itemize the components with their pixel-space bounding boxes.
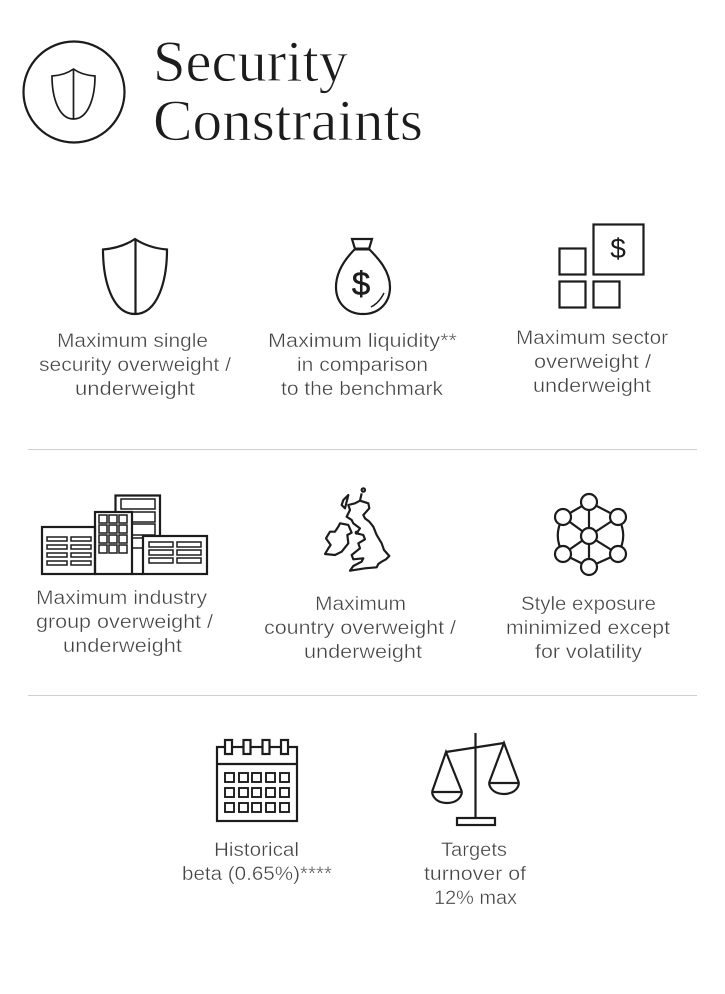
label: country: country overweight / — [264, 618, 457, 639]
icon: buildings — [42, 496, 207, 574]
label: style exposure: minimized except — [506, 618, 671, 639]
label: sector: underweight — [533, 376, 652, 397]
icon: money bag — [336, 239, 390, 314]
label: liquidity: in comparison — [297, 355, 428, 376]
label: country — [264, 594, 457, 663]
icon: network of circles — [555, 494, 626, 575]
icon: shield — [103, 239, 167, 314]
title — [153, 29, 423, 153]
label: industry group: group overweight / — [36, 612, 214, 633]
label: historical beta — [182, 840, 333, 885]
label: single security: underweight — [75, 379, 196, 400]
label: historical beta: Historical — [214, 840, 299, 861]
label: liquidity: Maximum liquidity** — [268, 331, 458, 352]
label: sector — [516, 328, 669, 397]
label: single security — [39, 331, 232, 400]
label: turnover target: turnover of — [424, 864, 527, 885]
label: sector: Maximum sector — [516, 328, 669, 349]
title: Security — [153, 29, 348, 94]
icon: calendar — [217, 740, 297, 821]
icon: sector squares: $ — [610, 233, 626, 264]
icon: sector squares — [560, 224, 644, 308]
icon: balance scales — [432, 733, 519, 825]
label: style exposure: for volatility — [535, 642, 643, 663]
label: single security: security overweight / — [39, 355, 232, 376]
label: country: underweight — [304, 642, 423, 663]
label: liquidity — [268, 331, 458, 400]
label: turnover target: Targets — [441, 840, 507, 861]
label: industry group: Maximum industry — [36, 588, 208, 609]
label: style exposure: Style exposure — [521, 594, 656, 615]
label: sector: overweight / — [534, 352, 652, 373]
label: turnover target: 12% max — [434, 888, 518, 909]
title: Constraints — [153, 88, 423, 153]
label: industry group — [36, 588, 214, 657]
icon: money bag: $ — [352, 265, 370, 302]
label: historical beta: beta (0.65%)**** — [182, 864, 333, 885]
header icon: shield in circle — [24, 42, 124, 142]
label: style exposure — [506, 594, 671, 663]
label: industry group: underweight — [63, 636, 183, 657]
icon: UK and Ireland map — [325, 488, 389, 571]
label: liquidity: to the benchmark — [281, 379, 444, 400]
label: turnover target — [424, 840, 527, 909]
label: single security: Maximum single — [57, 331, 208, 352]
label: country: Maximum — [315, 594, 406, 615]
